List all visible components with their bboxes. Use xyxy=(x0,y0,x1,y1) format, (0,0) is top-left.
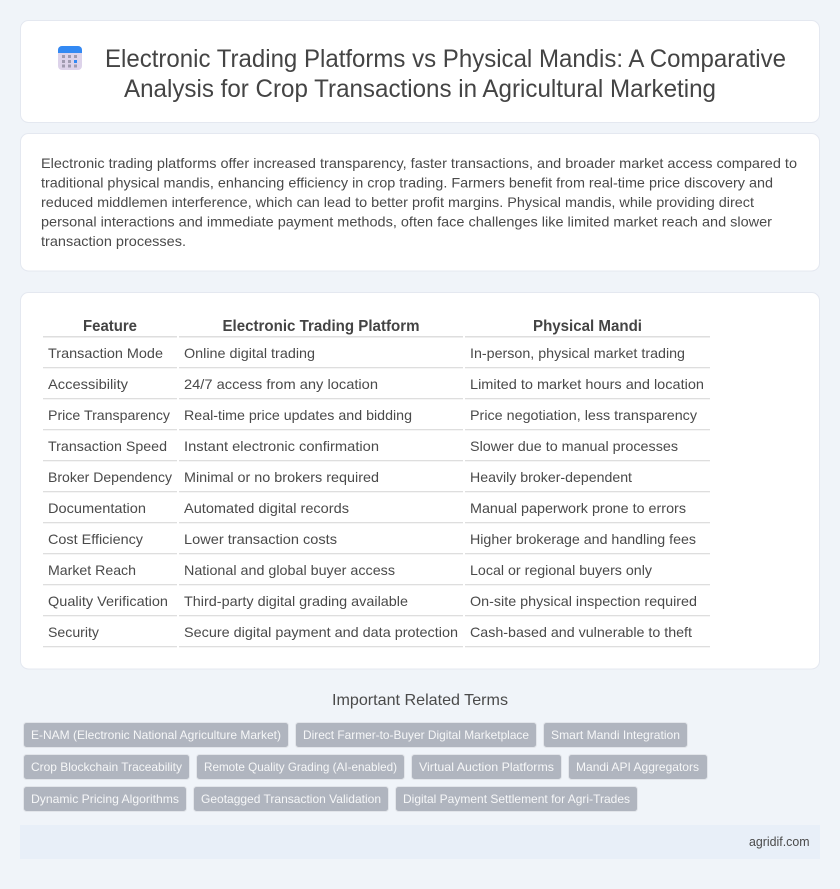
panel: summary paragraph: Electronic trading platforms offer increased transparency, faster transactions, and broader market access compared to xyxy=(41,155,797,171)
footer bar: agridif.com xyxy=(749,834,810,849)
chip: Mandi API Aggregators xyxy=(576,760,699,774)
chip: Geotagged Transaction Validation xyxy=(201,792,381,806)
row: Documentation xyxy=(48,500,686,516)
chip xyxy=(568,754,708,780)
row: Quality Verification: Quality Verification xyxy=(48,593,168,609)
title xyxy=(105,45,786,103)
chip xyxy=(196,754,404,780)
row: Documentation: Automated digital records xyxy=(184,500,349,516)
chip xyxy=(396,786,638,812)
table header row: Physical Mandi xyxy=(533,318,642,335)
title: Electronic Trading Platforms vs Physical Mandis: A Comparative xyxy=(105,45,786,73)
chip: Virtual Auction Platforms xyxy=(419,760,554,774)
panel: summary paragraph: reduced middlemen interference, which can lead to better profit margins. Physical mandis, while providing direct xyxy=(41,194,754,210)
row: Security: Secure digital payment and data protection xyxy=(184,624,458,640)
chip xyxy=(544,722,688,748)
panel: summary paragraph: traditional physical mandis, enhancing efficiency in crop trading. Farmers benefit from real-time price discovery and xyxy=(41,174,773,190)
chip xyxy=(24,754,190,780)
row: Accessibility: 24/7 access from any location xyxy=(184,376,378,392)
row: Accessibility: Accessibility xyxy=(48,376,128,392)
panel: comparison table xyxy=(20,292,820,669)
row: Broker Dependency: Broker Dependency xyxy=(48,469,172,485)
table header row: Feature xyxy=(83,318,137,335)
chip: Crop Blockchain Traceability xyxy=(31,760,182,774)
row: Broker Dependency xyxy=(48,469,632,485)
table header row xyxy=(83,318,642,335)
row: Price Transparency: Real-time price updates and bidding xyxy=(184,407,412,423)
chip xyxy=(194,786,388,812)
icon: calendar grid xyxy=(58,46,82,70)
row: Accessibility xyxy=(48,376,704,392)
row: Accessibility: Limited to market hours and location xyxy=(470,376,704,392)
chip: Remote Quality Grading (AI-enabled) xyxy=(204,760,397,774)
chip: Digital Payment Settlement for Agri-Trades xyxy=(403,792,630,806)
row: Transaction Mode: Online digital trading xyxy=(184,345,315,361)
chip: Dynamic Pricing Algorithms xyxy=(31,792,179,806)
row: Market Reach: Market Reach xyxy=(48,562,136,578)
row: Transaction Speed: Instant electronic confirmation xyxy=(184,438,379,454)
row: Price Transparency xyxy=(48,407,697,423)
chip xyxy=(296,722,536,748)
row: Market Reach: National and global buyer access xyxy=(184,562,395,578)
row: Market Reach xyxy=(48,562,652,578)
row: Transaction Mode: Transaction Mode xyxy=(48,345,163,361)
row: Market Reach: Local or regional buyers only xyxy=(470,562,652,578)
row: Broker Dependency: Heavily broker-dependent xyxy=(470,469,632,485)
chip: E-NAM (Electronic National Agriculture Market) xyxy=(31,728,281,742)
row: Transaction Mode xyxy=(48,345,685,361)
chip: Smart Mandi Integration xyxy=(551,728,680,742)
row: Cost Efficiency: Higher brokerage and handling fees xyxy=(470,531,696,547)
row: Price Transparency: Price Transparency xyxy=(48,407,170,423)
row: Cost Efficiency xyxy=(48,531,696,547)
footer bar xyxy=(20,825,820,859)
title: Analysis for Crop Transactions in Agricultural Marketing xyxy=(124,75,716,103)
panel: summary paragraph: transaction processes. xyxy=(41,233,186,249)
chip: Direct Farmer-to-Buyer Digital Marketplace xyxy=(303,728,529,742)
row: Transaction Speed: Slower due to manual processes xyxy=(470,438,678,454)
row: Documentation: Documentation xyxy=(48,500,146,516)
row: Transaction Mode: In-person, physical market trading xyxy=(470,345,685,361)
row: Documentation: Manual paperwork prone to errors xyxy=(470,500,686,516)
row: Security: Cash-based and vulnerable to theft xyxy=(470,624,692,640)
heading: important related terms: Important Related Terms xyxy=(332,692,508,709)
panel: related term chips xyxy=(24,722,708,812)
panel: title header xyxy=(20,20,820,122)
row: Cost Efficiency: Cost Efficiency xyxy=(48,531,143,547)
panel: summary paragraph xyxy=(20,134,820,271)
row: Security: Security xyxy=(48,624,99,640)
row: Quality Verification: On-site physical inspection required xyxy=(470,593,697,609)
panel: summary paragraph: personal interactions and immediate payment methods, often face challenges like limited market reach and slower xyxy=(41,214,772,230)
row: Broker Dependency: Minimal or no brokers required xyxy=(184,469,379,485)
chip xyxy=(24,786,186,812)
row: Quality Verification: Third-party digital grading available xyxy=(184,593,408,609)
table header row: Electronic Trading Platform xyxy=(222,318,420,335)
chip xyxy=(412,754,562,780)
row: Security xyxy=(48,624,692,640)
row: Cost Efficiency: Lower transaction costs xyxy=(184,531,337,547)
row: Transaction Speed: Transaction Speed xyxy=(48,438,167,454)
chip xyxy=(24,722,288,748)
row: Quality Verification xyxy=(48,593,697,609)
row: Price Transparency: Price negotiation, less transparency xyxy=(470,407,697,423)
row: Transaction Speed xyxy=(48,438,678,454)
